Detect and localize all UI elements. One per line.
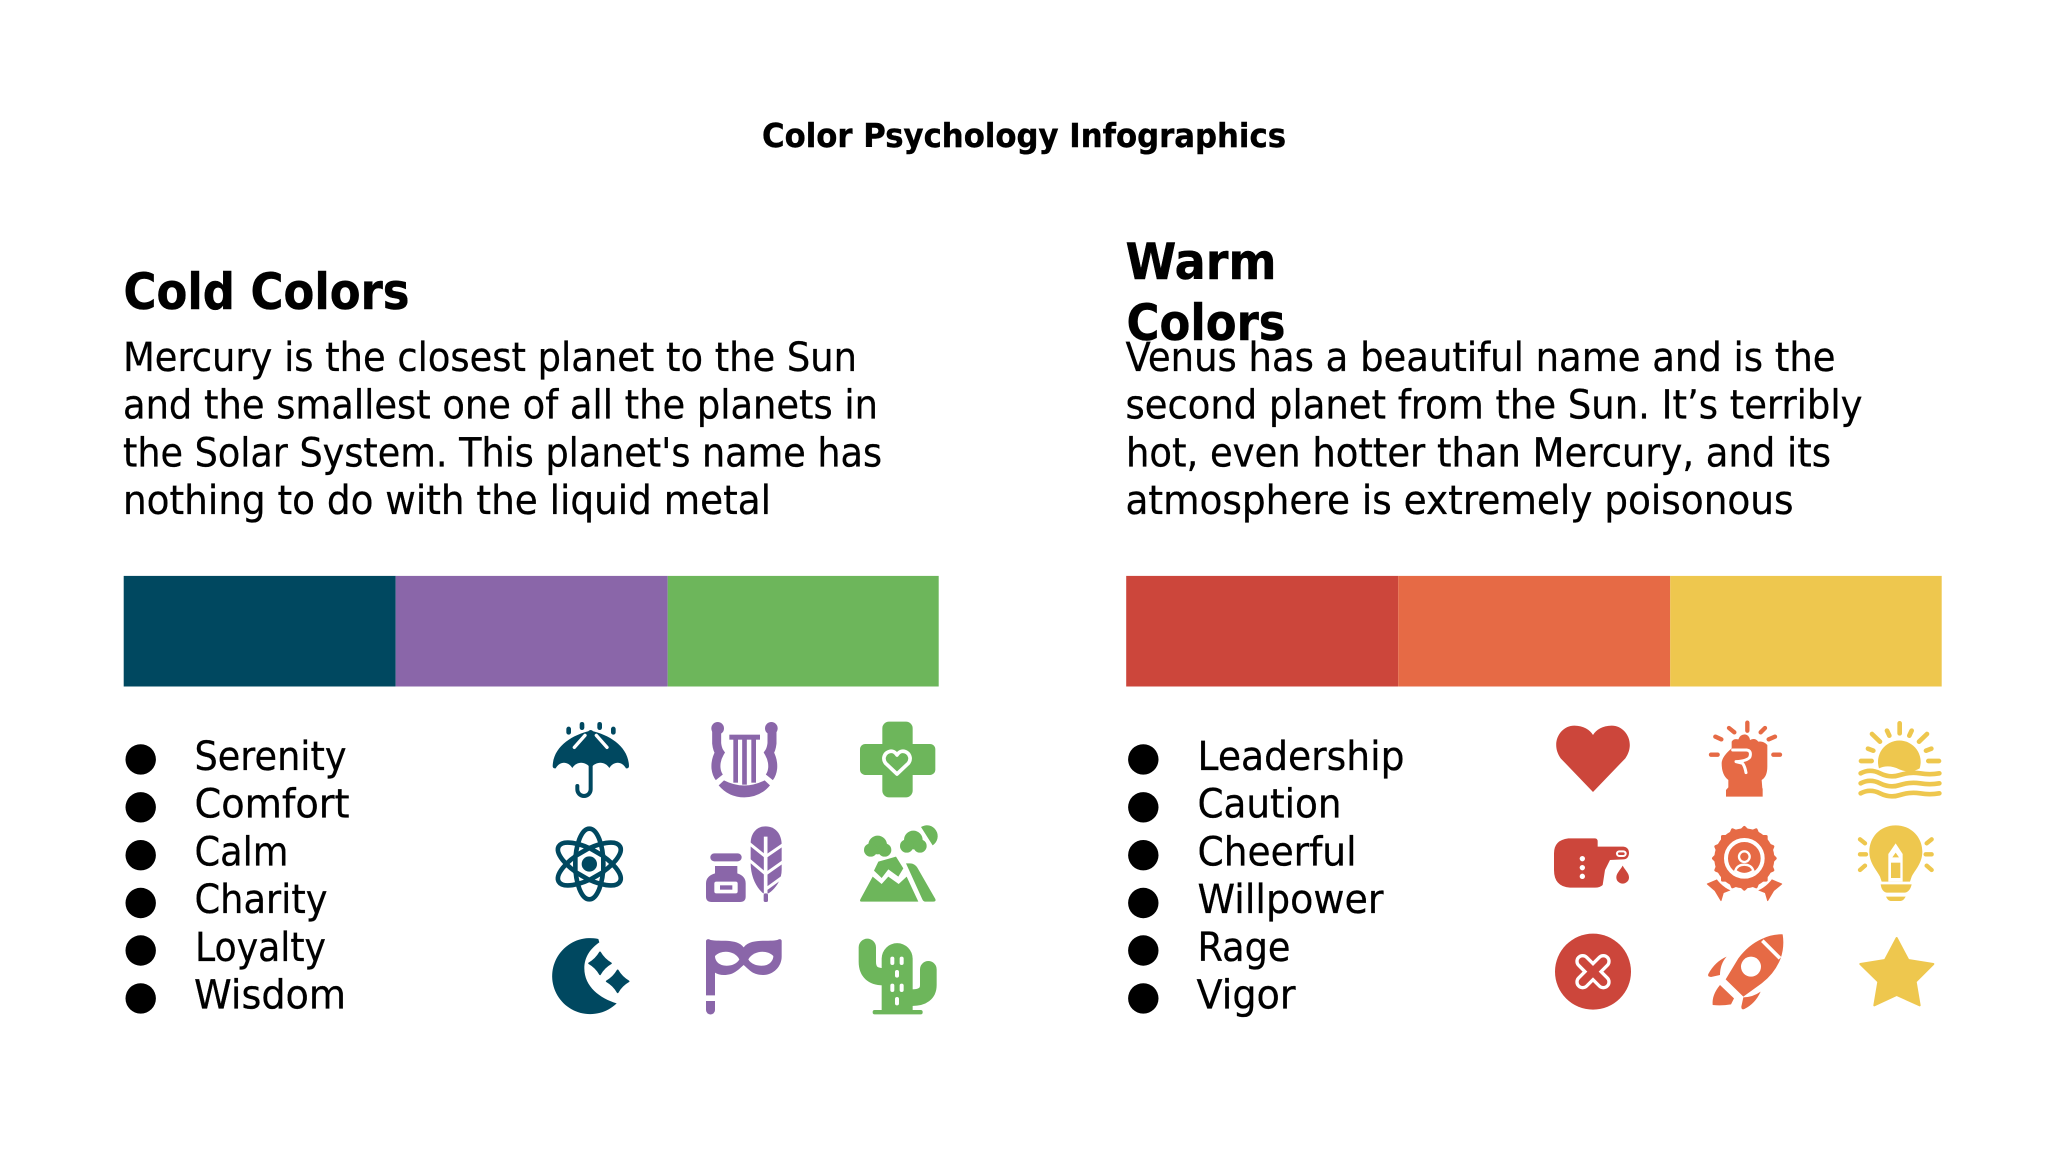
list: cold traits: Loyalty bbox=[195, 925, 326, 971]
color bar: cold bbox=[124, 576, 939, 686]
list: warm traits: Cheerful bbox=[1198, 830, 1356, 876]
icon grid: warm bbox=[1554, 723, 1939, 1010]
heading: warm colors: Colors bbox=[1126, 294, 1286, 352]
list: warm traits: Caution bbox=[1198, 782, 1342, 828]
list: cold traits bbox=[126, 734, 350, 1019]
icon: star bbox=[1860, 938, 1933, 1005]
panel: warm colors bbox=[1126, 233, 1942, 1019]
list: cold traits: Charity bbox=[194, 877, 328, 923]
icon: cross in circle bbox=[1555, 934, 1631, 1010]
icon: lyre bbox=[711, 722, 778, 797]
list: cold traits: Calm bbox=[194, 830, 288, 876]
text block: cold description: nothing to do with the liquid metal bbox=[123, 478, 771, 524]
icon: pointing finger with drop bbox=[1554, 838, 1629, 888]
panel: cold colors bbox=[123, 263, 939, 1019]
list: warm traits: Leadership bbox=[1198, 734, 1404, 780]
icon: heart bbox=[1556, 726, 1630, 792]
text block: cold description bbox=[123, 335, 882, 524]
icon: raised fist bbox=[1711, 723, 1780, 797]
list: warm traits: Vigor bbox=[1196, 973, 1296, 1019]
icon: atom bbox=[552, 829, 627, 899]
text block: cold description: Mercury is the closest planet to the Sun bbox=[123, 335, 857, 381]
icon: umbrella bbox=[553, 722, 629, 796]
text block: warm description: Venus has a beautiful name and is the bbox=[1126, 335, 1836, 381]
list: warm traits bbox=[1128, 734, 1404, 1019]
icon: mountain landscape bbox=[860, 825, 938, 902]
icon grid: cold bbox=[552, 722, 938, 1014]
icon: ink bottle and feather bbox=[706, 826, 784, 902]
text block: warm description: second planet from the Sun. It’s terribly bbox=[1126, 383, 1862, 429]
icon: moon and stars bbox=[552, 938, 629, 1014]
text block: warm description: atmosphere is extremely poisonous bbox=[1126, 478, 1794, 524]
list: cold traits: Serenity bbox=[194, 734, 346, 780]
text block: warm description bbox=[1126, 335, 1862, 524]
icon: cactus bbox=[867, 943, 928, 1014]
list: cold traits: Wisdom bbox=[194, 973, 346, 1019]
heading: warm colors: Warm bbox=[1126, 233, 1276, 291]
color bar: warm bbox=[1126, 576, 1942, 686]
text block: cold description: and the smallest one of all the planets in bbox=[123, 383, 878, 429]
icon: sunrise over waves bbox=[1861, 723, 1939, 796]
icon: award badge bbox=[1707, 825, 1782, 901]
text block: warm description: hot, even hotter than Mercury, and its bbox=[1126, 430, 1831, 476]
heading: cold colors: Cold Colors bbox=[124, 263, 410, 321]
heading: warm colors bbox=[1126, 233, 1286, 352]
list: warm traits: Willpower bbox=[1198, 877, 1384, 923]
title: Color Psychology Infographics bbox=[762, 116, 1286, 155]
icon: carnival mask bbox=[706, 939, 782, 1014]
text block: cold description: the Solar System. This planet's name has bbox=[123, 430, 882, 476]
icon: medical cross with heart bbox=[860, 722, 935, 797]
icon: rocket bbox=[1708, 934, 1783, 1009]
icon: light bulb with pencil bbox=[1860, 825, 1932, 901]
list: cold traits: Comfort bbox=[194, 782, 350, 828]
list: warm traits: Rage bbox=[1198, 925, 1290, 971]
